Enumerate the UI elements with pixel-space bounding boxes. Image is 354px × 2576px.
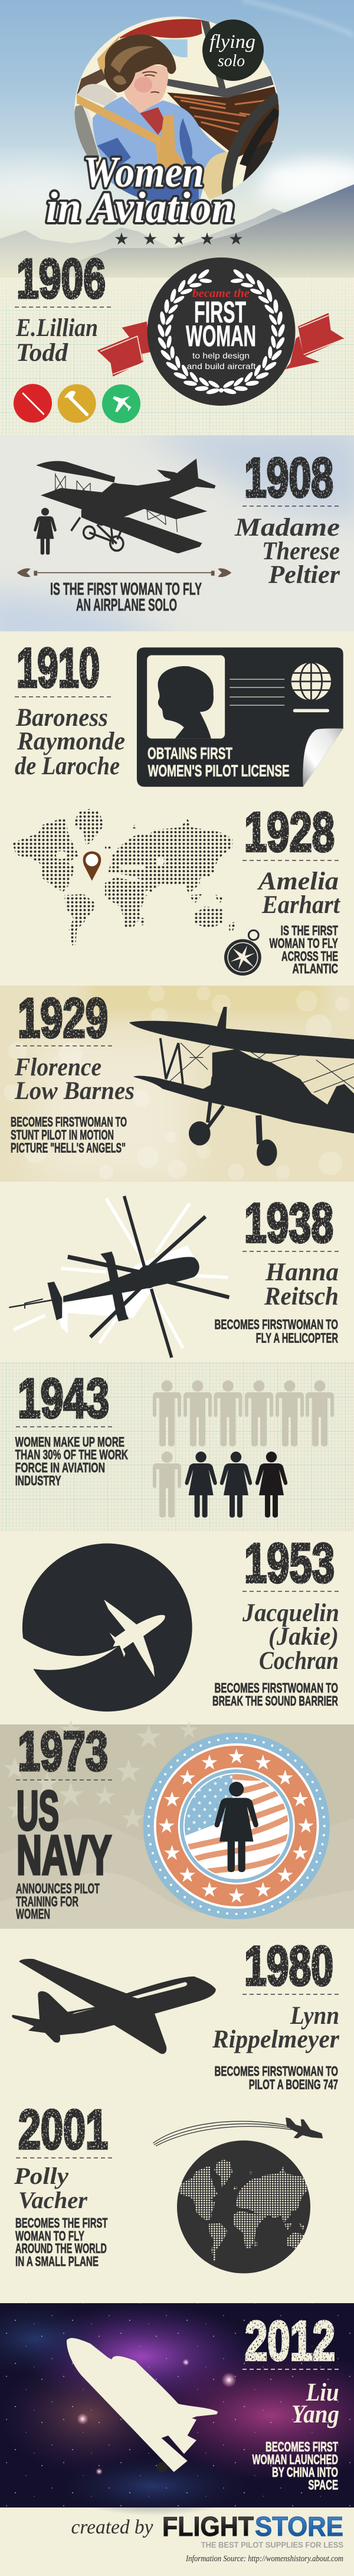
caption: THAN 30% OF THE WORK xyxy=(15,1447,128,1462)
name: Earhart xyxy=(261,891,341,919)
year 1973: 1973 xyxy=(18,1720,108,1782)
caption xyxy=(269,922,338,976)
title xyxy=(46,148,235,232)
panel: 1943 xyxy=(0,1362,354,1531)
panel: footer xyxy=(71,2511,343,2564)
caption xyxy=(212,1680,338,1708)
badge: flying solo: flying xyxy=(209,31,255,53)
five stars xyxy=(115,233,242,244)
name: de Laroche xyxy=(15,752,120,780)
caption: AROUND THE WORLD xyxy=(15,2241,107,2256)
clouds xyxy=(0,0,354,210)
caption xyxy=(253,2439,338,2492)
name: Jacquelin xyxy=(242,1599,339,1627)
caption: STUNT PILOT IN MOTION xyxy=(11,1127,114,1142)
dashed rule xyxy=(15,306,113,308)
biplane silhouette xyxy=(36,459,215,553)
badge text: and build aircraft xyxy=(186,361,256,371)
icon: compass xyxy=(224,930,261,976)
name: Reitsch xyxy=(264,1283,339,1310)
caption: PICTURE "HELL'S ANGELS" xyxy=(11,1140,126,1155)
name xyxy=(234,514,340,589)
title: in Aviation xyxy=(46,184,235,232)
badge text: WOMAN xyxy=(186,319,256,353)
name xyxy=(15,704,125,780)
grid paper xyxy=(0,1362,354,1531)
name: Peltier xyxy=(268,561,340,589)
dashed rule xyxy=(242,860,342,861)
pictogram: workforce xyxy=(153,1381,334,1518)
panel: 1929 xyxy=(0,974,354,1182)
pilot license card: WOMEN'S PILOT LICENSE xyxy=(148,762,290,780)
caption: BECOMES FIRSTWOMAN TO xyxy=(11,1114,127,1129)
panel: 1973 xyxy=(0,1720,354,1929)
globe with dotted map xyxy=(176,2140,312,2274)
ribbon banner xyxy=(97,313,345,377)
logo: FlightStore xyxy=(162,2511,343,2542)
ring of stars xyxy=(159,1749,314,1903)
panel: 1928 xyxy=(9,801,342,976)
name xyxy=(264,1258,339,1310)
dotted world map xyxy=(9,806,239,948)
pilot license card: OBTAINS FIRST xyxy=(148,744,232,762)
name: Madame xyxy=(234,514,340,542)
name xyxy=(14,1054,135,1105)
caption xyxy=(15,2215,107,2269)
year 1943: 1943 xyxy=(18,1367,109,1429)
name xyxy=(14,2163,87,2213)
icon: woman xyxy=(34,508,57,555)
jet silhouette xyxy=(12,1959,216,2054)
name xyxy=(291,2379,339,2428)
laurel wreath xyxy=(156,268,286,397)
dashed rule xyxy=(242,2369,342,2370)
caption: BECOMES THE FIRST xyxy=(15,2215,107,2231)
dashed rule xyxy=(242,1994,342,1995)
caption: TRAINING FOR xyxy=(16,1894,78,1910)
mountains xyxy=(0,184,354,278)
dashed rule xyxy=(15,696,113,697)
dashed rule xyxy=(16,1426,115,1427)
name: E.Lillian xyxy=(15,314,98,342)
name: Yang xyxy=(291,2401,339,2428)
flag xyxy=(184,1774,288,1873)
caption: WOMAN TO FLY xyxy=(15,2228,84,2244)
panel: 2012 xyxy=(0,2303,354,2516)
badge text: FIRST xyxy=(194,295,246,329)
created by: created by xyxy=(71,2516,153,2538)
name xyxy=(212,2002,340,2053)
dashed rule xyxy=(242,1251,342,1252)
flag background xyxy=(0,1720,354,1929)
plane with flight trail xyxy=(153,2118,323,2146)
caption xyxy=(11,1114,127,1155)
emblem: stars and stripes xyxy=(143,1733,330,1919)
caption xyxy=(215,1317,338,1345)
name: Vacher xyxy=(18,2187,87,2213)
name xyxy=(15,314,98,367)
icon: red pencil circle xyxy=(14,384,52,423)
name: Raymonde xyxy=(17,728,125,755)
caption: WOMEN xyxy=(16,1906,50,1922)
panel: hero header xyxy=(0,0,354,435)
caption xyxy=(15,1434,128,1488)
panel: 2001 xyxy=(14,2098,323,2274)
biplane silhouette xyxy=(129,1007,354,1166)
caption: ANNOUNCES PILOT xyxy=(16,1881,100,1897)
panel: 1908 xyxy=(0,425,354,650)
grid paper for first section xyxy=(0,260,354,435)
logo: FlightStore: FLIGHT xyxy=(162,2511,254,2542)
arrow divider xyxy=(17,568,231,577)
sky background xyxy=(0,425,354,650)
name xyxy=(257,868,341,919)
badge text xyxy=(186,287,256,371)
panel: 1906 xyxy=(14,247,345,423)
caption: WOMEN MAKE UP MORE xyxy=(15,1434,124,1449)
portrait illustration xyxy=(72,16,282,207)
icon: green plane circle xyxy=(102,384,140,423)
dashed rule xyxy=(242,1591,342,1592)
name: Amelia xyxy=(257,868,339,895)
dashed rule xyxy=(16,1045,115,1046)
icon: yellow hammer circle xyxy=(58,384,96,423)
caption xyxy=(16,1881,100,1922)
panel: 1938 xyxy=(9,1192,342,1358)
sky background xyxy=(0,0,354,278)
title: Women xyxy=(83,148,204,197)
tagline: THE BEST PILOT SUPPLIES FOR LESS xyxy=(201,2540,343,2549)
name: Todd xyxy=(16,339,69,367)
globe with jet xyxy=(18,1544,192,1711)
caption: AN AIRPLANE SOLO xyxy=(76,596,177,615)
heading: US Navy: US xyxy=(17,1779,59,1841)
name: Lynn xyxy=(290,2002,339,2030)
name: Liu xyxy=(306,2379,339,2407)
heading: US Navy xyxy=(17,1779,112,1886)
caption: INDUSTRY xyxy=(15,1473,61,1488)
panel: 1953 xyxy=(18,1532,342,1711)
logo: FlightStore: STORE xyxy=(255,2511,343,2542)
space shuttle silhouette xyxy=(67,2338,218,2472)
dashed rule xyxy=(242,506,342,507)
name: Baroness xyxy=(15,704,108,732)
name: Rippelmeyer xyxy=(212,2026,340,2053)
helicopter silhouette xyxy=(9,1196,229,1358)
caption: IN A SMALL PLANE xyxy=(15,2254,99,2269)
panel: 1980 xyxy=(12,1935,342,2092)
name: Hanna xyxy=(265,1258,339,1286)
bokeh background xyxy=(0,974,354,1182)
heading: US Navy: NAVY xyxy=(17,1824,112,1886)
name xyxy=(242,1599,339,1675)
badge text: became the xyxy=(192,287,250,300)
woman figure xyxy=(215,1782,258,1872)
year 1906: 1906 xyxy=(17,247,106,309)
name: Polly xyxy=(14,2163,68,2189)
name: Florence xyxy=(14,1054,101,1081)
name: Cochran xyxy=(259,1647,339,1675)
name: (Jakie) xyxy=(268,1623,339,1651)
badge text: to help design xyxy=(192,351,250,360)
badge: flying solo: solo xyxy=(218,51,245,70)
panel: 1910 xyxy=(15,637,343,787)
name: Therese xyxy=(262,537,340,565)
year 2001: 2001 xyxy=(18,2098,108,2160)
name: Low Barnes xyxy=(14,1077,135,1105)
space background xyxy=(0,2303,354,2516)
icon: map pin xyxy=(83,852,101,881)
round badge: first woman xyxy=(148,257,295,406)
caption xyxy=(215,2063,338,2092)
badge: flying solo xyxy=(202,19,264,81)
pilot license card xyxy=(137,647,343,787)
dashed rule xyxy=(16,2157,115,2158)
year 1929: 1929 xyxy=(18,987,108,1049)
caption: IS THE FIRST WOMAN TO FLY xyxy=(50,580,202,599)
dashed rule xyxy=(16,1779,115,1781)
caption xyxy=(50,580,202,615)
caption: SPACE xyxy=(308,2477,338,2492)
caption: FORCE IN AVIATION xyxy=(15,1460,105,1475)
year 1910: 1910 xyxy=(17,637,100,699)
